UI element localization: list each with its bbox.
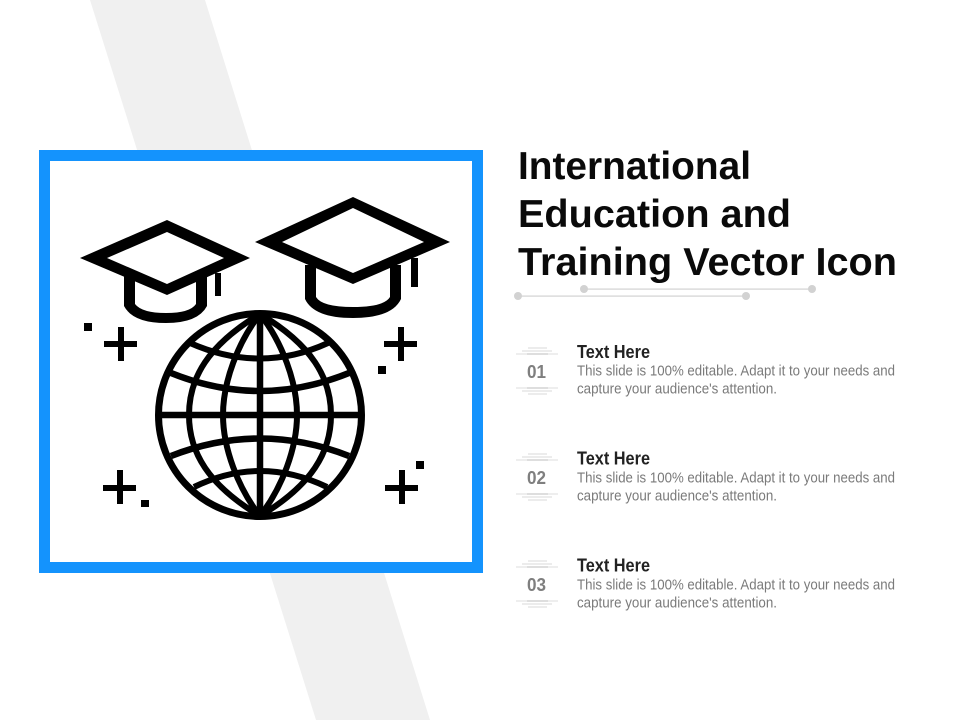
icon: international education (80, 197, 450, 516)
icon: sparkle bottom right (385, 461, 424, 504)
list item 01 (516, 342, 895, 398)
number badge 02 (516, 454, 558, 500)
number badge 01 (516, 348, 558, 394)
item body 03: This slide is 100% editable. Adapt it to your needs and (577, 578, 895, 594)
item body 03: capture your audience's attention. (577, 596, 777, 612)
item heading 02: Text Here (577, 448, 650, 468)
icon: sparkle bottom left (103, 470, 149, 507)
background diagonal stripe (90, 0, 430, 720)
number badge 02: 02 (527, 468, 546, 488)
item body 01: capture your audience's attention. (577, 382, 777, 398)
item body 02: capture your audience's attention. (577, 488, 777, 504)
item heading 03: Text Here (577, 556, 650, 576)
title: Training Vector Icon (518, 241, 897, 284)
item body 01: This slide is 100% editable. Adapt it to your needs and (577, 364, 895, 380)
title: Education and (518, 193, 791, 236)
panel: blue icon frame (44, 156, 478, 568)
title divider with dots (514, 285, 816, 300)
number badge 01: 01 (527, 362, 546, 382)
icon: large graduation cap (255, 197, 450, 318)
icon: sparkle top left (84, 323, 137, 361)
list item 02 (516, 448, 895, 504)
item body 02: This slide is 100% editable. Adapt it to your needs and (577, 470, 895, 486)
list item 03 (516, 556, 895, 612)
icon: sparkle top right (378, 327, 417, 374)
item heading 01: Text Here (577, 342, 650, 362)
icon: small graduation cap (80, 220, 250, 323)
icon: wireframe globe (158, 314, 362, 516)
number badge 03: 03 (527, 575, 546, 595)
title: International (518, 145, 751, 188)
number badge 03 (516, 561, 558, 607)
